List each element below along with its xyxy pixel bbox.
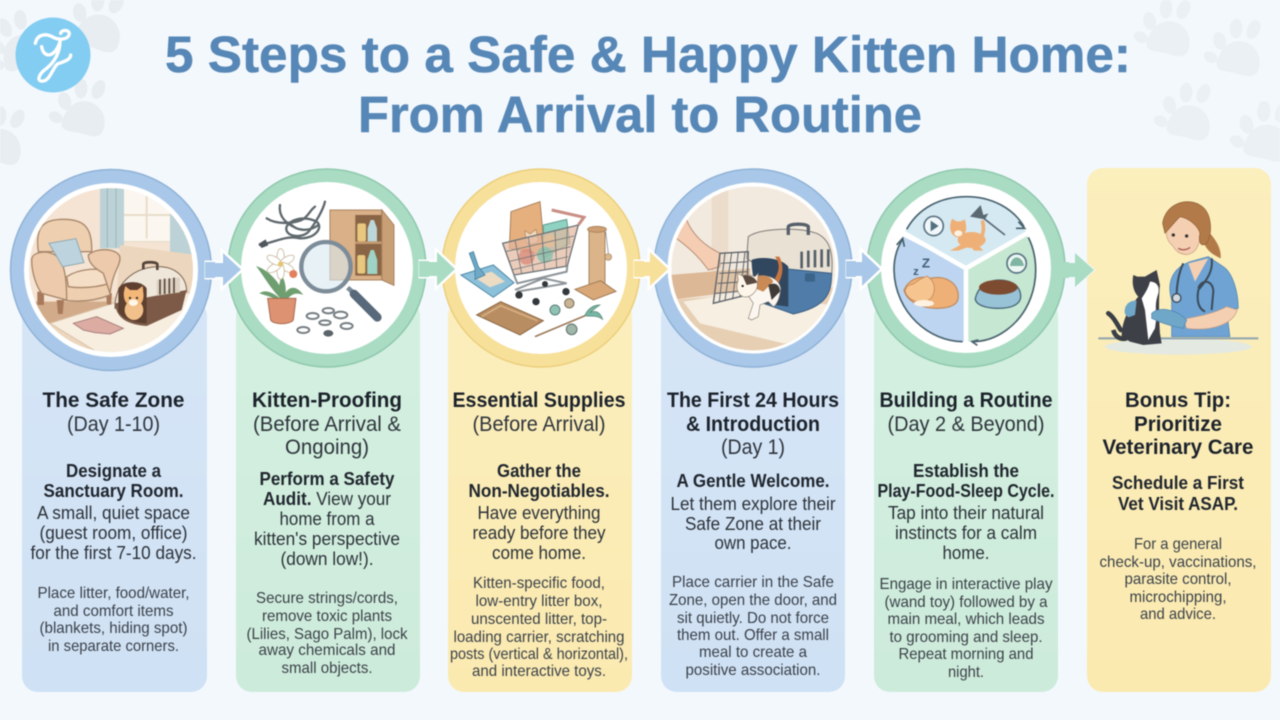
heading	[42, 388, 185, 436]
detail text: away chemicals and	[258, 642, 396, 659]
detail text: parasite control,	[1124, 571, 1232, 588]
main text: home.	[942, 543, 990, 563]
detail text: (wand toy) followed by a	[884, 594, 1048, 611]
detail text: small objects.	[282, 660, 372, 677]
detail text: (blankets, hiding spot)	[40, 620, 188, 637]
heading	[1102, 388, 1254, 459]
main text: Safe Zone at their	[685, 514, 821, 534]
heading: (Before Arrival &	[253, 412, 401, 436]
detail text: loading carrier, scratching	[454, 629, 624, 646]
panel background	[874, 300, 1058, 692]
main text	[878, 461, 1054, 563]
illustration: safety audit objects	[256, 202, 394, 337]
panel background	[1087, 168, 1271, 692]
ring	[442, 169, 640, 367]
detail text: meal to create a	[699, 644, 807, 661]
main text: Audit. View your	[263, 489, 391, 509]
detail text: sit quietly. Do not force	[677, 610, 829, 627]
heading	[880, 388, 1053, 436]
main text: home from a	[280, 509, 375, 529]
main text	[254, 469, 400, 569]
main text	[1112, 473, 1244, 514]
heading: (Day 1-10)	[67, 412, 160, 436]
detail text: low-entry litter box,	[476, 593, 602, 610]
main text: A Gentle Welcome.	[676, 471, 830, 491]
main text: come home.	[492, 543, 586, 563]
detail text	[669, 574, 837, 679]
detail text: Place litter, food/water,	[38, 585, 190, 602]
main text: Establish the	[913, 461, 1019, 481]
panel: kitten-proofing	[228, 169, 426, 692]
main text: Let them explore their	[670, 494, 836, 514]
detail text: check-up, vaccinations,	[1100, 554, 1256, 571]
ring	[10, 170, 212, 370]
heading: Bonus Tip:	[1125, 388, 1231, 412]
heading: Veterinary Care	[1102, 435, 1254, 459]
heading: Building a Routine	[880, 388, 1053, 412]
heading: The Safe Zone	[42, 388, 185, 412]
main text: Schedule a First	[1112, 473, 1244, 493]
detail text: them out. Offer a small	[677, 627, 829, 644]
main text: Vet Visit ASAP.	[1118, 494, 1238, 514]
heading: Essential Supplies	[452, 388, 626, 412]
main text: Designate a	[66, 461, 162, 481]
detail text: Kitten-specific food,	[473, 575, 605, 592]
detail text: in separate corners.	[48, 638, 179, 655]
ring	[228, 169, 426, 367]
logo	[16, 18, 90, 92]
detail text: microchipping,	[1130, 589, 1226, 606]
detail text: to grooming and sleep.	[890, 629, 1042, 646]
heading: (Day 2 & Beyond)	[888, 412, 1044, 436]
detail text: For a general	[1134, 536, 1222, 553]
main text: (guest room, office)	[40, 523, 188, 543]
heading: Ongoing)	[285, 435, 369, 459]
main text	[30, 461, 196, 563]
ring	[867, 169, 1065, 367]
panel: essential supplies	[442, 169, 640, 692]
detail text: (Lilies, Sago Palm), lock	[246, 626, 408, 643]
detail text: remove toxic plants	[262, 608, 392, 625]
illustration: play-food-sleep cycle	[894, 196, 1036, 345]
detail text: and advice.	[1140, 606, 1216, 623]
main text: instincts for a calm	[895, 523, 1037, 543]
detail text: posts (vertical & horizontal),	[450, 646, 628, 663]
panel: the safe zone	[10, 170, 212, 692]
heading: (Before Arrival)	[472, 412, 606, 436]
detail text	[880, 576, 1052, 681]
heading: (Day 1)	[721, 435, 785, 459]
detail text	[1100, 536, 1256, 623]
main text: Play-Food-Sleep Cycle.	[878, 481, 1054, 501]
detail text: Secure strings/cords,	[256, 590, 398, 607]
main text: Sanctuary Room.	[44, 481, 184, 501]
main text: kitten's perspective	[254, 529, 400, 549]
detail text: Repeat morning and	[898, 646, 1034, 663]
illustration: play-food-sleep cycle: Z	[922, 255, 930, 270]
panel: first 24 hours	[654, 169, 852, 692]
arrow: step 1 to 2	[205, 253, 241, 286]
main text: A small, quiet space	[37, 503, 190, 523]
main text: Tap into their natural	[888, 503, 1044, 523]
heading: Kitten-Proofing	[252, 388, 402, 412]
panel background	[236, 300, 420, 692]
panel background	[448, 300, 632, 692]
main text	[468, 461, 610, 563]
illustration: room with carrier	[27, 187, 197, 360]
panel: building a routine	[867, 169, 1065, 692]
detail text: unscented litter, top-	[471, 611, 607, 628]
heading	[452, 388, 626, 436]
main text: own pace.	[714, 533, 792, 553]
illustration: vet with cat	[1098, 202, 1258, 355]
detail text: Engage in interactive play	[880, 576, 1052, 593]
main text: for the first 7-10 days.	[30, 543, 196, 563]
title	[165, 26, 1131, 143]
title: From Arrival to Routine	[358, 86, 922, 143]
illustration: kitten leaving carrier	[670, 187, 840, 360]
ring	[654, 169, 852, 367]
main text: Gather the	[497, 461, 581, 481]
heading	[252, 388, 402, 459]
panel background	[22, 300, 207, 692]
title: 5 Steps to a Safe & Happy Kitten Home:	[165, 26, 1131, 83]
main text: ready before they	[472, 523, 606, 543]
detail text: Place carrier in the Safe	[672, 574, 834, 591]
arrow: step 2 to 3	[419, 252, 455, 286]
detail text: positive association.	[686, 662, 820, 679]
heading: & Introduction	[686, 412, 820, 436]
illustration: play-food-sleep cycle: z	[913, 266, 919, 278]
main text: Have everything	[478, 503, 600, 523]
heading: Prioritize	[1134, 412, 1222, 436]
arrow: step 5 to bonus	[1059, 253, 1094, 287]
detail text: and comfort items	[54, 603, 174, 620]
panel: bonus tip	[1087, 168, 1271, 692]
heading: The First 24 Hours	[667, 388, 839, 412]
detail text: and interactive toys.	[472, 663, 606, 680]
heading	[667, 388, 839, 459]
panel background	[661, 300, 845, 692]
background paw prints	[0, 0, 1280, 169]
main text: Non-Negotiables.	[468, 481, 610, 501]
arrow: step 3 to 4	[634, 252, 668, 286]
detail text: night.	[948, 664, 984, 681]
detail text	[450, 575, 628, 680]
detail text: main meal, which leads	[888, 611, 1044, 628]
main text: (down low!).	[280, 549, 374, 569]
detail text: Zone, open the door, and	[669, 592, 837, 609]
main text	[670, 471, 836, 553]
detail text	[38, 585, 190, 655]
detail text	[246, 590, 408, 677]
main text: Perform a Safety	[260, 469, 394, 489]
arrow: step 4 to 5	[846, 252, 880, 286]
illustration: shopping cart and supplies	[461, 202, 616, 337]
